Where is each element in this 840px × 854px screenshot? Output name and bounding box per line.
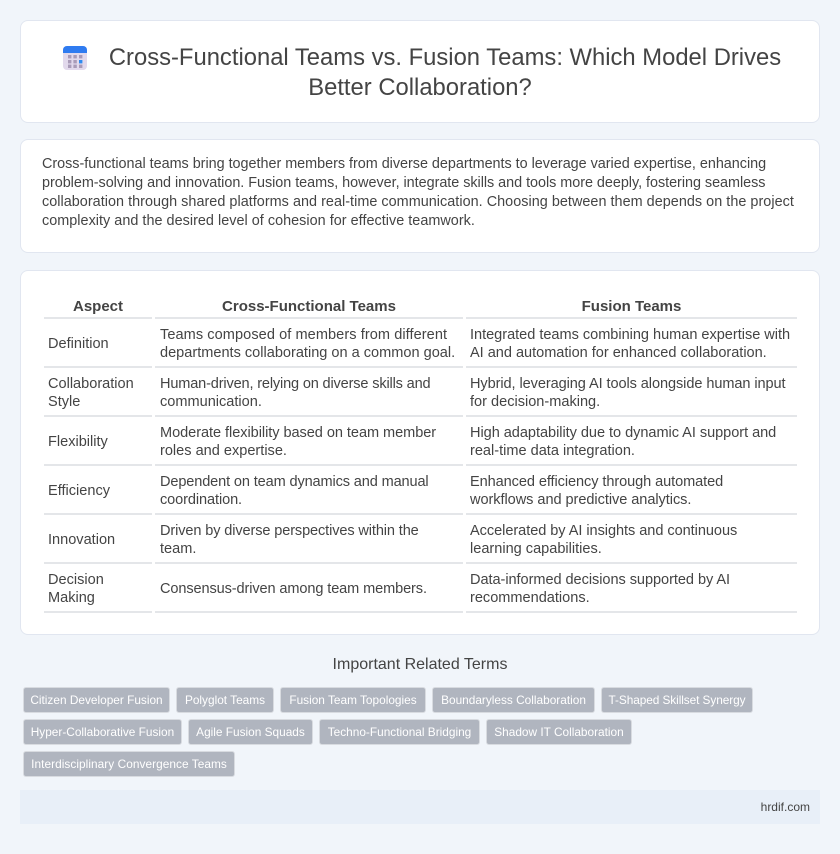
intro text: collaboration through shared platforms and real-time communication. Choosing between them depends on the project xyxy=(42,194,794,210)
related term tags: Polyglot Teams xyxy=(185,693,265,707)
footer source: hrdif.com xyxy=(761,800,810,814)
comparison table: Driven by diverse perspectives within the xyxy=(160,523,419,539)
comparison table: Consensus-driven among team members. xyxy=(160,581,427,597)
related term tags: Agile Fusion Squads xyxy=(196,725,305,739)
title: Cross-Functional Teams vs. Fusion Teams: Which Model Drives xyxy=(109,44,781,71)
comparison table: Enhanced efficiency through automated xyxy=(470,474,723,490)
intro text: Cross-functional teams bring together members from diverse departments to leverage varied expertise, enhancing xyxy=(42,156,766,172)
related term tags: T-Shaped Skillset Synergy xyxy=(609,693,745,707)
table card xyxy=(20,270,820,635)
comparison table: AI and automation for enhanced collaboration. xyxy=(470,345,767,361)
intro text: complexity and the desired level of cohesion for effective teamwork. xyxy=(42,213,475,229)
comparison table: for decision-making. xyxy=(470,394,600,410)
comparison table: Decision xyxy=(48,572,104,588)
comparison table: recommendations. xyxy=(470,590,590,606)
comparison table: Integrated teams combining human expertise with xyxy=(470,327,790,343)
comparison table: roles and expertise. xyxy=(160,443,287,459)
comparison table: Data-informed decisions supported by AI xyxy=(470,572,730,588)
title xyxy=(109,44,781,101)
related term tags: Shadow IT Collaboration xyxy=(494,725,624,739)
comparison table xyxy=(44,298,797,613)
comparison table: Aspect xyxy=(73,298,123,315)
comparison table: learning capabilities. xyxy=(470,541,602,557)
comparison table: Teams composed of members from different xyxy=(160,327,447,343)
related term tags: Interdisciplinary Convergence Teams xyxy=(31,757,227,771)
comparison table: Making xyxy=(48,590,95,606)
comparison table: departments collaborating on a common goal. xyxy=(160,345,455,361)
comparison table: Dependent on team dynamics and manual xyxy=(160,474,429,490)
comparison table: Innovation xyxy=(48,532,115,548)
comparison table: Cross-Functional Teams xyxy=(222,298,396,315)
comparison table: Accelerated by AI insights and continuous xyxy=(470,523,737,539)
related term tags: Citizen Developer Fusion xyxy=(30,693,163,707)
related term tags: Techno-Functional Bridging xyxy=(328,725,471,739)
comparison table: Fusion Teams xyxy=(582,298,681,315)
icon: calendar xyxy=(63,46,87,70)
comparison table: communication. xyxy=(160,394,262,410)
related term tags: Boundaryless Collaboration xyxy=(441,693,586,707)
comparison table: High adaptability due to dynamic AI support and xyxy=(470,425,776,441)
comparison table: Style xyxy=(48,394,80,410)
title card xyxy=(20,20,820,123)
related term tags: Fusion Team Topologies xyxy=(289,693,417,707)
related terms heading: Important Related Terms xyxy=(333,656,507,673)
comparison table: Hybrid, leveraging AI tools alongside human input xyxy=(470,376,786,392)
intro text: problem-solving and innovation. Fusion teams, however, integrate skills and tools more deeply, fostering seamless xyxy=(42,175,765,191)
intro text xyxy=(42,156,794,229)
related term tags: Hyper-Collaborative Fusion xyxy=(31,725,174,739)
comparison table: Flexibility xyxy=(48,434,108,450)
comparison table: team. xyxy=(160,541,196,557)
title: Better Collaboration? xyxy=(308,74,532,101)
comparison table: Human-driven, relying on diverse skills and xyxy=(160,376,430,392)
intro card xyxy=(20,139,820,253)
comparison table: Efficiency xyxy=(48,483,110,499)
comparison table: Definition xyxy=(48,336,109,352)
comparison table: real-time data integration. xyxy=(470,443,635,459)
footer bar xyxy=(20,790,820,824)
comparison table: Collaboration xyxy=(48,376,134,392)
comparison table: workflows and predictive analytics. xyxy=(470,492,691,508)
comparison table: coordination. xyxy=(160,492,242,508)
comparison table: Moderate flexibility based on team member xyxy=(160,425,436,441)
